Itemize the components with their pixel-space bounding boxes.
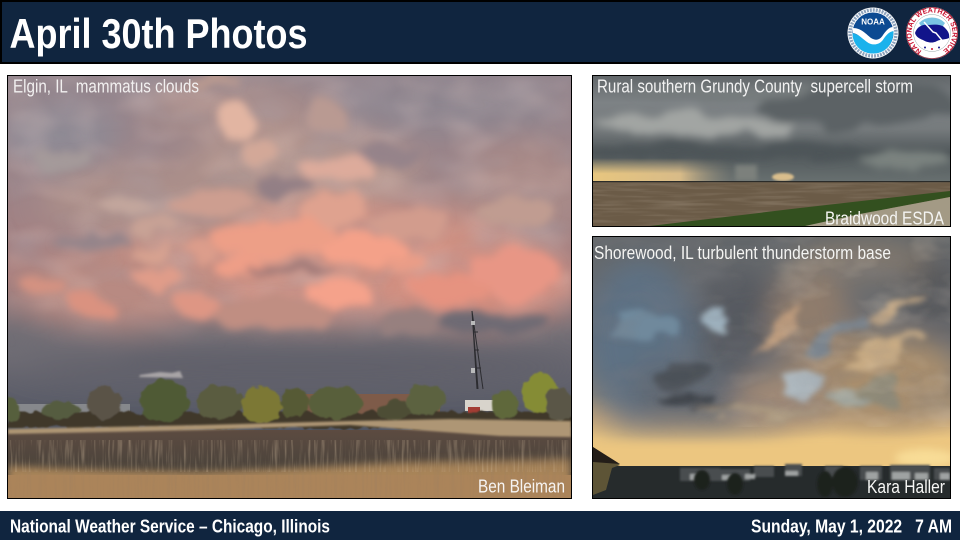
caption: Elgin: Elgin, IL mammatus clouds bbox=[13, 76, 199, 96]
icon: NOAA logo bbox=[848, 8, 898, 58]
tree line bbox=[4, 373, 574, 428]
footer: office name: National Weather Service – Chicago, Illinois bbox=[10, 516, 330, 536]
panel: Grundy County supercell photo bbox=[580, 76, 960, 228]
sky bbox=[8, 76, 571, 436]
credit: Braidwood ESDA: Braidwood ESDA bbox=[825, 208, 944, 228]
reed bank bbox=[8, 419, 571, 437]
radio tower bbox=[471, 311, 483, 389]
building behind trees bbox=[306, 394, 440, 414]
dark tree and house line bbox=[593, 466, 950, 498]
small white cloud bbox=[139, 371, 183, 378]
sunset glow bbox=[593, 159, 729, 181]
distant houses bbox=[680, 464, 950, 481]
turbulent cloud masses bbox=[585, 237, 960, 447]
foreground house bbox=[593, 447, 620, 495]
horizon glow bbox=[624, 442, 758, 452]
sky bbox=[593, 237, 950, 469]
panel: Elgin mammatus photo bbox=[0, 72, 590, 498]
mammatus clouds bbox=[8, 76, 571, 346]
credit: Ben Bleiman: Ben Bleiman bbox=[478, 476, 565, 496]
icon: NOAA logo: NOAA bbox=[861, 18, 885, 26]
icon: National Weather Service logo: NATIONAL WEATHER SERVICE bbox=[906, 8, 958, 54]
caption: Shorewood: Shorewood, IL turbulent thunderstorm base bbox=[594, 243, 891, 263]
farm field bbox=[593, 182, 950, 226]
sky bbox=[593, 76, 950, 182]
trees bbox=[694, 467, 858, 497]
credit: Kara Haller: Kara Haller bbox=[867, 477, 945, 497]
pond water bbox=[8, 430, 571, 475]
title: April 30th Photos bbox=[10, 10, 308, 57]
header banner bbox=[0, 0, 960, 64]
grass strip bbox=[650, 191, 950, 226]
textured cloud mottling bbox=[9, 76, 571, 307]
panel: Shorewood turbulent base photo bbox=[585, 236, 960, 498]
road bbox=[805, 197, 950, 226]
footer banner bbox=[0, 511, 960, 540]
foreground grass bbox=[8, 454, 571, 475]
